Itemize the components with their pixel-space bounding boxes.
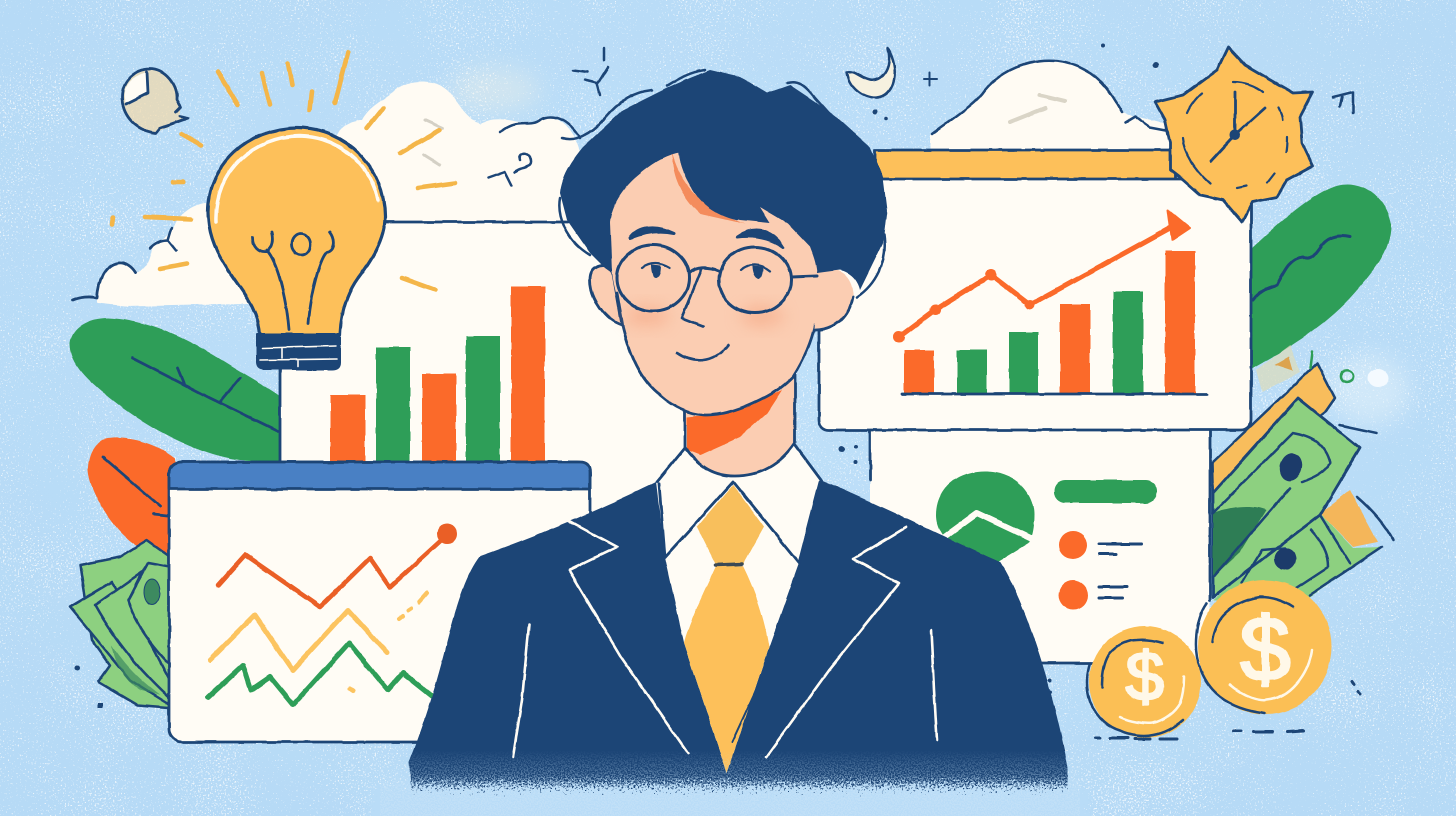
face <box>600 130 820 415</box>
hair back lines <box>559 70 885 297</box>
icon: sun clock <box>1155 47 1353 222</box>
eyebrows <box>630 227 783 247</box>
figure: businessman <box>409 70 1068 800</box>
eyes <box>642 264 770 279</box>
header bar: blue <box>169 462 590 489</box>
shirt <box>656 445 821 773</box>
nose <box>682 268 703 326</box>
jacket bottom grain <box>362 754 1096 816</box>
legend: first item <box>1059 531 1142 559</box>
line chart: green series <box>208 643 432 705</box>
icon: orange leaf <box>88 438 175 556</box>
pie chart: green <box>936 471 1034 562</box>
icon: right green leaf <box>1250 184 1391 392</box>
tie <box>684 485 769 773</box>
icon: light bulb <box>208 128 385 369</box>
cloud: left <box>73 200 270 306</box>
line chart: orange series <box>218 524 457 607</box>
ear left <box>590 266 622 325</box>
fringe shadow <box>672 152 745 224</box>
panel: lower right report <box>870 425 1210 663</box>
icon: light rays <box>112 52 455 290</box>
arrow: rising trend line <box>894 210 1190 342</box>
line chart: yellow series <box>210 610 387 670</box>
icon: coin large <box>1196 580 1332 714</box>
cloud: top centre <box>337 82 590 235</box>
icon: small doodle marks <box>74 43 1159 708</box>
text: dollar sign: $ <box>1126 638 1164 715</box>
icon: left banknotes <box>70 540 175 708</box>
glasses <box>617 245 817 313</box>
bar chart: right panel bars <box>902 251 1207 394</box>
icon: right banknotes <box>1212 352 1393 600</box>
neck <box>685 370 795 476</box>
cheek blush <box>625 305 784 327</box>
text: dollar sign: $ <box>1240 599 1290 700</box>
panel: back left bar chart <box>280 222 700 522</box>
cloud: top right <box>930 61 1172 155</box>
ear right <box>814 269 853 330</box>
mouth <box>677 345 728 360</box>
hair <box>560 70 887 290</box>
lapels <box>513 519 937 757</box>
legend: second item <box>1058 580 1127 610</box>
bar chart: left panel bars <box>330 286 545 465</box>
icon: crescent moon <box>847 48 937 98</box>
icon: coin small <box>1087 626 1201 738</box>
legend: green pill <box>1054 480 1157 503</box>
jacket <box>409 480 1068 800</box>
panel: right chart <box>819 150 1251 430</box>
icon: doodle star <box>573 48 608 95</box>
panel: front left line chart <box>169 462 590 742</box>
icon: ground dashes <box>1096 682 1360 739</box>
icon: small pie chart <box>122 69 188 133</box>
collar <box>657 445 821 563</box>
icon: left green leaf <box>70 318 285 462</box>
icon: yellow dashes <box>350 593 427 691</box>
